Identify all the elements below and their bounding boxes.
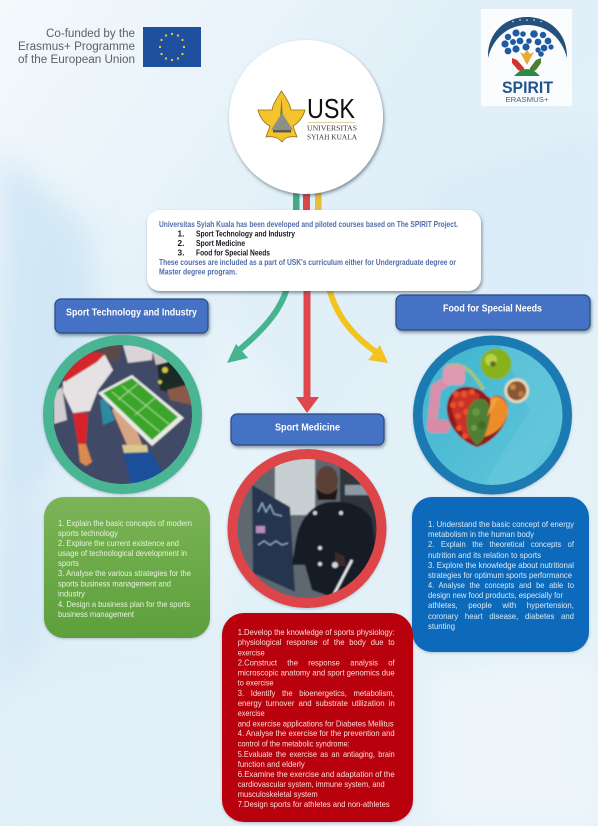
arrow: yellow to Food for Special Needs (329, 288, 388, 363)
panel: Sport Medicine outcomes: and exercise applications for Diabetes Mellitus (238, 718, 394, 728)
intro text: 2. (178, 238, 184, 248)
intro text: These courses are included as a part of USK's curriculum either for Undergraduate degree or (159, 257, 457, 267)
intro text: Sport Technology and Industry (196, 229, 295, 239)
intro text: Master degree program. (159, 267, 237, 277)
panel: Food for Special Needs outcomes: 1. Understand the basic concept of energy (428, 519, 575, 529)
heading: Sport Medicine (231, 414, 384, 445)
panel: Sport Technology outcomes: usage of technological development in (58, 548, 187, 558)
panel: Sport Medicine outcomes: to exercise (238, 678, 274, 688)
panel: Sport Technology outcomes: business management (58, 609, 135, 619)
panel: Sport Technology outcomes: 3. Analyse the various strategies for the (58, 568, 191, 578)
wordmark: USK (307, 93, 357, 142)
panel: Sport Medicine outcomes: 5.Evaluate the exercise as an antiaging, brain (238, 749, 395, 759)
heading: Food for Special Needs: Food for Special Needs (443, 304, 542, 314)
panel: Food for Special Needs outcomes: nutrition and its relation to sports (428, 550, 541, 560)
panel: Sport Medicine outcomes: exercise (238, 708, 265, 718)
panel: Sport Medicine outcomes: energy turnover and substrate utilization in (238, 698, 395, 708)
connector stems (293, 190, 322, 212)
arrow: green to Sport Technology (227, 288, 287, 363)
heading: Food for Special Needs (396, 295, 590, 330)
panel: Food for Special Needs outcomes: coronary heart disease, diabetes and (428, 611, 574, 621)
wordmark: USK: SYIAH KUALA (307, 134, 357, 142)
intro text (159, 219, 458, 277)
panel: Sport Medicine outcomes: 2.Construct the response analysis of (238, 658, 395, 668)
panel: Sport Medicine outcomes: control of the metabolic syndrome: (238, 738, 350, 748)
panel: Food for Special Needs outcomes: design new food products, especially for (428, 590, 563, 600)
panel: Sport Medicine outcomes: 6.Examine the exercise and adaptation of the (238, 769, 395, 779)
panel: Food for Special Needs outcomes: strategies for optimum sports performance (428, 570, 572, 580)
icon: USK flower emblem (258, 91, 305, 142)
intro text: Food for Special Needs (196, 248, 270, 258)
panel: Sport Medicine outcomes: function and elderly (238, 759, 305, 769)
logo: SPIRIT Erasmus+: SPIRIT (502, 78, 554, 97)
panel: Sport Technology outcomes: sports technology (58, 528, 119, 538)
panel: Food for Special Needs outcomes: 3. Explore the knowledge about nutritional (428, 560, 574, 570)
logo: SPIRIT Erasmus+: ERASMUS+ (506, 97, 548, 104)
intro text: Sport Medicine (196, 238, 245, 248)
panel: Sport Medicine outcomes: musculoskeletal system (238, 789, 318, 799)
panel: Sport Medicine outcomes: physiological response of the body due to (238, 637, 395, 647)
wordmark: USK: USK (307, 93, 355, 124)
panel: Sport Medicine outcomes: 4. Analyse the exercise for the prevention and (238, 728, 395, 738)
EU co-funding statement (18, 28, 135, 66)
photo circle: tablet with football tactics (43, 335, 202, 494)
panel: Sport Medicine outcomes: microscopic anatomy and sport genomics due (238, 668, 395, 678)
panel: Food for Special Needs outcomes: metabolism in the human body (428, 529, 535, 539)
intro text: 1. (178, 229, 184, 239)
logo circle: Universitas Syiah Kuala (229, 40, 383, 194)
panel: Sport Medicine outcomes: exercise (238, 648, 265, 658)
panel: introduction (147, 210, 481, 291)
panel: Food for Special Needs outcomes: stunting (428, 621, 455, 631)
heading: Sport Medicine: Sport Medicine (275, 422, 340, 434)
panel: Sport Technology outcomes (44, 497, 210, 638)
panel: Sport Technology outcomes: sports (58, 558, 79, 568)
EU co-funding statement: Co-funded by the (46, 28, 135, 40)
photo circle: athlete on treadmill with monitor (228, 449, 386, 608)
panel: Sport Medicine outcomes (222, 613, 413, 822)
intro text: Universitas Syiah Kuala has been developed and piloted courses based on The SPIRIT Project. (159, 219, 458, 229)
arrow: red to Sport Medicine (296, 288, 319, 413)
panel: Sport Medicine outcomes: 3. Identify the bioenergetics, metabolism, (238, 688, 395, 698)
panel: Food for Special Needs outcomes (412, 497, 589, 652)
panel: Sport Technology outcomes: industry (58, 588, 86, 598)
panel: Sport Technology outcomes: sports business management and (58, 578, 171, 588)
panel: Sport Technology outcomes: 1. Explain the basic concepts of modern (58, 518, 192, 528)
logo: SPIRIT Erasmus+ (481, 9, 572, 106)
photo circle: healthy food and dumbbell (413, 336, 572, 494)
panel: Sport Technology outcomes: 4. Design a business plan for the sports (58, 599, 190, 609)
panel: Sport Medicine outcomes: 7.Design sports for athletes and non-athletes (238, 799, 390, 809)
EU co-funding statement: Erasmus+ Programme (18, 41, 135, 53)
icon: EU flag (143, 27, 201, 67)
panel: Sport Medicine outcomes: cardiovascular system, immune system, and (238, 779, 385, 789)
panel: Food for Special Needs outcomes: 4. Analyse the concepts and be able to (428, 580, 574, 590)
heading: Sport Technology and Industry: Sport Technology and Industry (66, 308, 197, 318)
panel: Food for Special Needs outcomes: 2. Explain the theoretical concepts of (428, 539, 575, 549)
intro text: 3. (178, 248, 184, 258)
EU co-funding statement: of the European Union (18, 54, 135, 66)
heading: Sport Technology and Industry (55, 299, 208, 333)
panel: Food for Special Needs outcomes: athletes, people with hypertension, (428, 600, 574, 610)
wordmark: USK: UNIVERSITAS (307, 124, 357, 132)
panel: Sport Medicine outcomes: 1.Develop the knowledge of sports physiology: (238, 627, 395, 637)
panel: Sport Technology outcomes: 2. Explore the current existence and (58, 538, 179, 548)
